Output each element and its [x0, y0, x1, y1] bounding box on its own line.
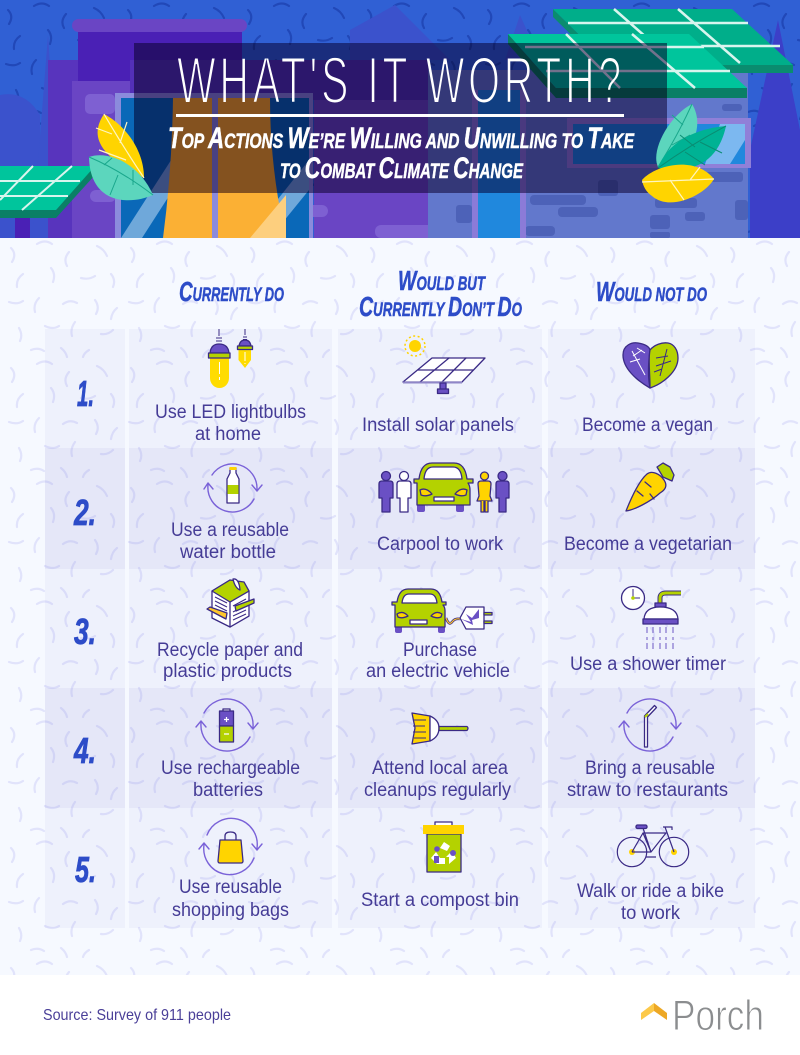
rank number 2: 2.	[73, 492, 96, 533]
column heading: would but currently don't do	[359, 265, 522, 322]
subtitle	[168, 122, 635, 185]
icon: broom	[412, 713, 468, 744]
label: Recycle paper and plastic products: plastic products	[163, 661, 292, 682]
label: Purchase an electric vehicle: Purchase	[403, 640, 477, 661]
label: Use reusable shopping bags: Use reusable	[179, 877, 282, 898]
leaf: teal right	[658, 126, 726, 170]
label: Walk or ride a bike to work	[577, 881, 724, 924]
label: Use a reusable water bottle: Use a reusable	[171, 520, 289, 541]
icon: bicycle	[617, 825, 689, 867]
title: WHAT'S IT WORTH?	[177, 43, 625, 117]
label: Install solar panels: Install solar panels	[362, 415, 514, 436]
subtitle: TOP ACTIONS WE’RE WILLING AND UNWILLING TO TAKE	[168, 122, 635, 155]
column heading: would but currently don't do: CURRENTLY DON’T DO	[359, 291, 522, 322]
column heading: would but currently don't do: WOULD BUT	[398, 265, 486, 296]
label: Become a vegetarian: Become a vegetarian	[564, 534, 732, 555]
label: Start a compost bin: Start a compost bin	[361, 890, 519, 911]
icon: reusable water bottle	[204, 464, 262, 512]
rank number 3: 3.	[74, 611, 96, 652]
label: Use reusable shopping bags	[172, 877, 289, 921]
large window with curtains	[115, 93, 313, 238]
solar panel: centre right	[508, 34, 747, 98]
logo mark	[641, 1003, 667, 1020]
label: Carpool to work: Carpool to work	[377, 534, 503, 555]
solar panel: upper right	[553, 9, 793, 73]
subtitle: TO COMBAT CLIMATE CHANGE	[280, 152, 524, 185]
leaf: teal left	[89, 155, 153, 200]
label: Purchase an electric vehicle: an electric vehicle	[366, 661, 510, 682]
logo: Porch	[641, 1000, 762, 1030]
icon: reusable shopping bag	[199, 818, 262, 875]
person	[379, 472, 393, 512]
leaf: light teal right	[656, 104, 697, 167]
label: Bring a reusable straw to restaurants	[567, 758, 728, 801]
background silhouettes	[0, 5, 540, 238]
label: Use rechargeable batteries	[161, 758, 300, 801]
person	[477, 472, 492, 512]
icon: compost bin	[423, 822, 464, 872]
label: Attend local area cleanups regularly: cleanups regularly	[364, 780, 511, 801]
building: blue-grey brick	[428, 70, 751, 238]
rank number 5: 5.	[75, 849, 96, 890]
header banner illustration	[0, 0, 800, 238]
building: purple	[48, 19, 435, 238]
label: Use rechargeable batteries: Use rechargeable	[161, 758, 300, 779]
icon: LED lightbulbs	[208, 329, 252, 388]
label: Bring a reusable straw to restaurants: Bring a reusable	[585, 758, 715, 779]
label: Recycle paper and plastic products	[157, 640, 303, 682]
icon: reusable straw	[619, 699, 681, 751]
label: Use reusable shopping bags: shopping bags	[172, 900, 289, 921]
icon: recycled paper stack	[207, 579, 254, 627]
label: Use a reusable water bottle: water bottle	[179, 542, 276, 563]
label: Use LED lightbulbs at home: Use LED lightbulbs	[155, 402, 306, 423]
column heading: would not do: WOULD NOT DO	[596, 276, 707, 307]
leaf: yellow left	[96, 114, 144, 178]
column heading: currently do: CURRENTLY DO	[179, 276, 284, 307]
icon: carpool	[379, 463, 509, 512]
label: Recycle paper and plastic products: Recycle paper and	[157, 640, 303, 661]
title underline	[176, 114, 624, 117]
dark title panel	[134, 43, 667, 193]
table background	[0, 238, 800, 975]
label: Attend local area cleanups regularly: Attend local area	[372, 758, 508, 779]
icon: shower timer	[622, 586, 681, 649]
icon: rechargeable battery	[196, 699, 258, 751]
label: Use rechargeable batteries: batteries	[193, 780, 263, 801]
label: Use a shower timer: Use a shower timer	[570, 654, 727, 675]
icon: carrot	[626, 463, 674, 511]
label: Attend local area cleanups regularly	[364, 758, 511, 801]
label: Use a reusable water bottle	[171, 520, 289, 563]
logo wordmark: Porch	[672, 992, 764, 1040]
label: Become a vegan: Become a vegan	[582, 415, 713, 436]
leaf: yellow right	[642, 165, 714, 202]
label: Bring a reusable straw to restaurants: straw to restaurants	[567, 780, 728, 801]
icon: electric vehicle and plug	[392, 589, 492, 633]
solar panel: left	[0, 165, 95, 238]
label: Use LED lightbulbs at home: at home	[195, 424, 261, 445]
source note: Source: Survey of 911 people	[43, 1007, 231, 1024]
label: Purchase an electric vehicle	[366, 640, 510, 682]
car	[414, 463, 473, 512]
person	[397, 472, 411, 512]
rank number 4: 4.	[73, 730, 96, 771]
person	[496, 472, 509, 512]
label: Walk or ride a bike to work: Walk or ride a bike	[577, 881, 724, 902]
label: Walk or ride a bike to work: to work	[621, 903, 680, 924]
rank number 1: 1.	[77, 373, 94, 414]
icon: vegan heart leaf	[623, 343, 678, 388]
label: Use LED lightbulbs at home	[155, 402, 306, 445]
icon: sun and solar panel	[403, 336, 485, 394]
